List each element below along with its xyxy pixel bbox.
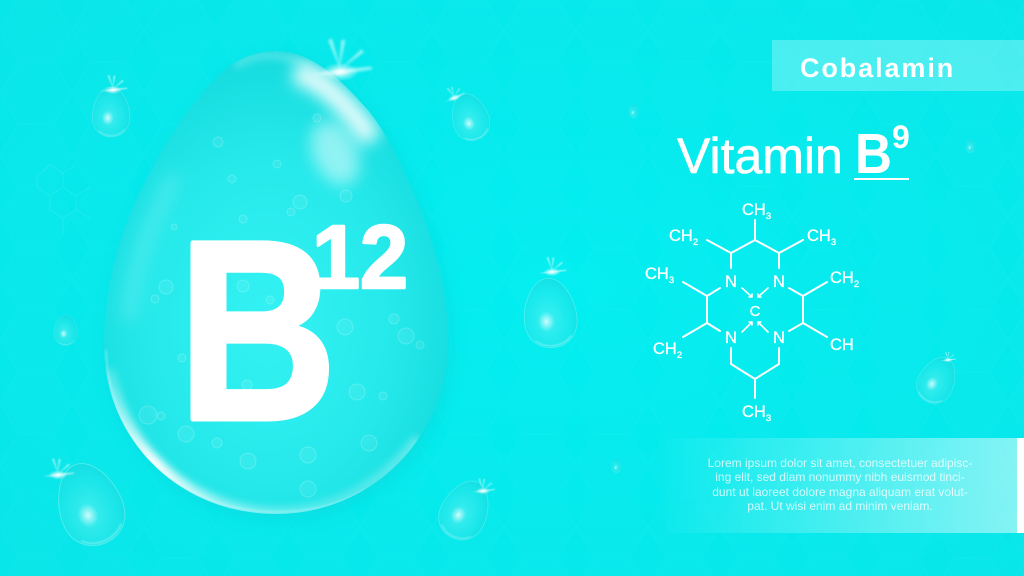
molecule diagram: N — [773, 273, 785, 291]
description panel: ing elit, sed diam nonummy nibh euismod tinci- — [715, 470, 965, 484]
molecule diagram: 3 — [766, 211, 771, 222]
vitamin heading: Vitamin — [677, 128, 843, 184]
cobalamin label — [772, 40, 1024, 91]
molecule diagram: CH — [807, 227, 831, 245]
molecule diagram: N — [773, 329, 785, 347]
molecule diagram: CH — [742, 403, 766, 421]
molecule diagram: CH — [830, 336, 854, 354]
sparkle on drop 6 — [472, 478, 495, 494]
drop rim highlight — [108, 370, 420, 514]
molecule diagram: 3 — [669, 275, 674, 286]
vitamin heading: 9 — [892, 119, 910, 155]
drop inner left band — [128, 175, 175, 320]
drop 1 — [92, 75, 130, 137]
molecule diagram: 2 — [693, 237, 698, 248]
drop 3 — [521, 257, 579, 350]
tiny drop a — [628, 104, 639, 118]
description panel: Lorem ipsum dolor sit amet, consectetuer adipisc- — [708, 456, 972, 470]
drop top highlight — [295, 72, 372, 140]
molecule diagram: CH — [645, 265, 669, 283]
molecule diagram: CH — [669, 227, 693, 245]
molecule diagram: CH — [653, 340, 677, 358]
molecule diagram: C — [750, 303, 761, 320]
B12 label: B — [178, 187, 337, 474]
molecule diagram: CH — [742, 201, 766, 219]
sparkle on drop 7 — [941, 352, 956, 362]
molecule diagram: CH — [830, 269, 854, 287]
drop 4 — [54, 315, 77, 345]
tiny drop c — [611, 459, 622, 473]
small water drops — [43, 75, 976, 554]
drop 7 — [911, 351, 963, 409]
molecule diagram: 3 — [766, 413, 771, 424]
molecule diagram: 3 — [831, 237, 836, 248]
molecule diagram — [645, 201, 859, 424]
drop 2 — [441, 78, 495, 146]
B12 label — [178, 187, 408, 474]
vitamin heading: B — [855, 122, 892, 186]
drop 6 — [431, 473, 499, 547]
molecule diagram: N — [725, 329, 737, 347]
cobalamin label: Cobalamin — [800, 53, 955, 83]
drop sparkle — [311, 39, 372, 81]
description panel — [666, 438, 1024, 533]
drop 5 — [45, 454, 134, 554]
main water drop — [104, 39, 452, 519]
molecule diagram: 2 — [677, 350, 682, 361]
drop bubbles — [139, 114, 424, 497]
description panel: pat. Ut wisi enim ad minim veniam. — [747, 499, 933, 513]
sparkle on drop 5 — [43, 458, 74, 480]
vitamin heading — [677, 119, 910, 186]
description panel: dunt ut laoreet dolore magna aliquam erat volut- — [712, 485, 968, 499]
B12 label: 12 — [312, 208, 408, 308]
molecule diagram: 2 — [854, 279, 859, 290]
molecule diagram: N — [725, 273, 737, 291]
tiny drop b — [965, 139, 976, 153]
faint molecule watermark left — [37, 165, 90, 234]
